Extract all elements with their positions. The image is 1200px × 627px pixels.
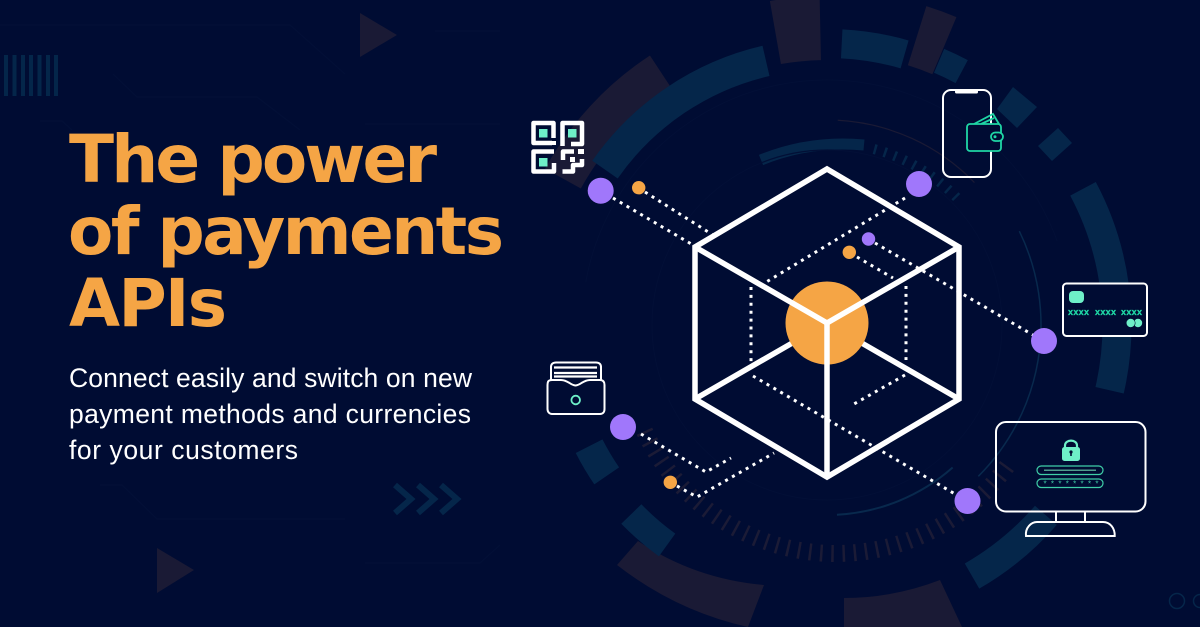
- icon: monitor with login: [996, 422, 1146, 536]
- subtitle: Connect easily and switch on new: [69, 363, 473, 393]
- title: of payments: [68, 193, 504, 270]
- subtitle: payment methods and currencies: [69, 399, 471, 429]
- icon: QR code: [534, 123, 584, 172]
- icon: phone with wallet: [943, 90, 1003, 177]
- background decoration: left: [0, 13, 500, 593]
- title: [68, 121, 504, 342]
- central orange node: [786, 282, 868, 364]
- title: The power: [69, 121, 437, 198]
- title: APIs: [69, 265, 227, 342]
- connector nodes: [588, 171, 1057, 514]
- icon: credit card: xxxx: [1121, 307, 1142, 317]
- icon: monitor with login: ********: [1044, 480, 1098, 488]
- icon: card wallet: [548, 362, 604, 414]
- cube: lower spokes: [695, 323, 959, 399]
- background rings: [541, 28, 1200, 627]
- subtitle: [69, 363, 473, 465]
- icon: credit card: [1063, 284, 1147, 336]
- icon: credit card: xxxx: [1095, 307, 1116, 317]
- icon: credit card: xxxx: [1068, 307, 1089, 317]
- dotted connectors: [613, 192, 1033, 497]
- subtitle: for your customers: [69, 435, 298, 465]
- cube: frame: [695, 169, 959, 477]
